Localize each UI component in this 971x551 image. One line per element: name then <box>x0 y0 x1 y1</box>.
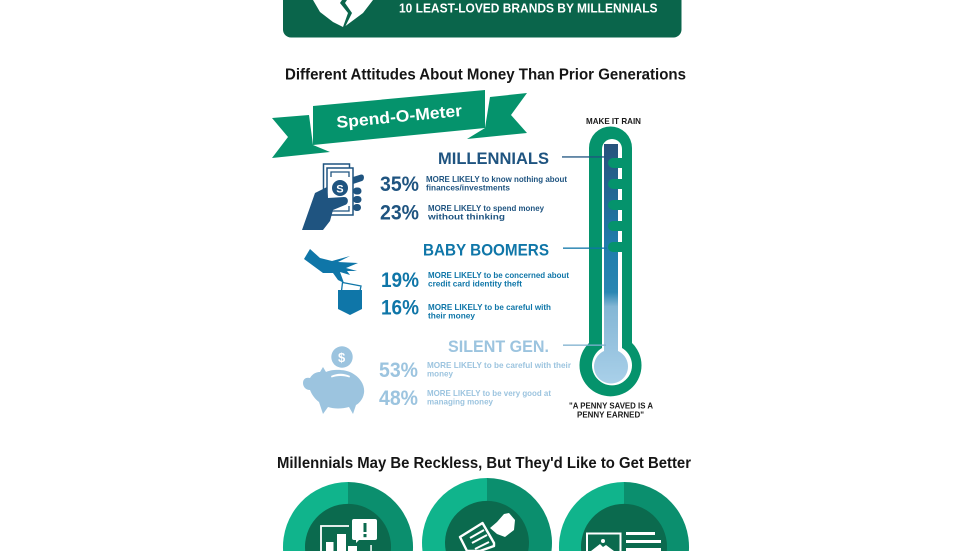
stat: 35%: MORE LIKELY to know nothing about <box>426 174 567 184</box>
stat: 19%: 19% <box>381 269 419 292</box>
heading: millennials: MILLENNIALS <box>438 149 549 168</box>
section: baby boomers <box>304 240 607 320</box>
stat: 16% <box>381 296 551 320</box>
thermometer label: make it rain: MAKE IT RAIN <box>586 116 641 126</box>
thermometer tick marks <box>608 158 623 252</box>
thermometer label: penny saved: "A PENNY SAVED IS A <box>569 400 653 410</box>
heading: baby boomers: BABY BOOMERS <box>423 240 549 260</box>
stat: 23%: MORE LIKELY to spend money <box>428 203 544 213</box>
stat: 19% <box>381 269 569 292</box>
circle badge: article layout <box>559 482 689 551</box>
thermometer label: penny saved: PENNY EARNED" <box>577 410 644 420</box>
stat: 35%: finances/investments <box>426 182 510 192</box>
header banner <box>283 0 682 38</box>
stat: 53%: 53% <box>379 359 418 382</box>
stat: 23%: 23% <box>380 202 419 224</box>
icon: piggy bank with coin <box>303 346 364 414</box>
circle badge: pen and checklist <box>422 478 552 551</box>
stat: 53%: money <box>427 368 453 378</box>
header subtitle: 10 LEAST-LOVED BRANDS BY MILLENNIALS <box>399 2 658 16</box>
circle badge: chart with alert <box>283 482 413 551</box>
connector: millennials <box>562 156 606 158</box>
thermometer label: penny saved <box>569 400 653 420</box>
heading: different attitudes: Different Attitudes About Money Than Prior Generations <box>285 66 686 84</box>
section: silent generation <box>303 337 606 414</box>
icon: hand holding money <box>302 164 364 230</box>
thermometer <box>569 116 653 420</box>
icon: image and text lines <box>587 532 661 551</box>
icon: hand dropping card in pocket <box>304 249 362 315</box>
thermometer body <box>580 126 642 396</box>
stat: 19%: MORE LIKELY to be concerned about <box>428 270 569 280</box>
ribbon: Spend-O-Meter: Spend-O-Meter <box>336 102 463 132</box>
stat: 53% <box>379 359 572 382</box>
stat: 35%: 35% <box>380 173 419 196</box>
icon: piggy bank with coin: $ <box>338 350 346 365</box>
connector: silent gen <box>563 344 606 346</box>
stat: 23%: without thinking <box>427 212 505 222</box>
stat: 35% <box>380 173 567 196</box>
section: millennials <box>302 149 606 230</box>
stat: 16%: MORE LIKELY to be careful with <box>428 302 551 312</box>
connector: baby boomers <box>563 248 607 249</box>
stat: 53%: MORE LIKELY to be careful with their <box>427 360 572 370</box>
heading: silent gen: SILENT GEN. <box>448 337 549 356</box>
ribbon: Spend-O-Meter <box>272 90 527 158</box>
icon: pen and checklist <box>460 513 515 551</box>
stat: 48%: 48% <box>379 387 418 410</box>
heading: millennials may be reckless: Millennials May Be Reckless, But They'd Like to Get Better <box>277 455 691 472</box>
icon: hand holding money: S <box>336 183 344 195</box>
stat: 16%: their money <box>428 310 475 320</box>
stat: 48%: managing money <box>427 396 493 406</box>
stat: 16%: 16% <box>381 296 419 320</box>
stat: 48%: MORE LIKELY to be very good at <box>427 388 551 398</box>
stat: 48% <box>379 387 551 410</box>
icon: broken heart <box>313 0 373 27</box>
stat: 23% <box>380 202 544 224</box>
icon: bar chart and speech bubble <box>321 519 377 551</box>
stat: 19%: credit card identity theft <box>428 278 522 288</box>
